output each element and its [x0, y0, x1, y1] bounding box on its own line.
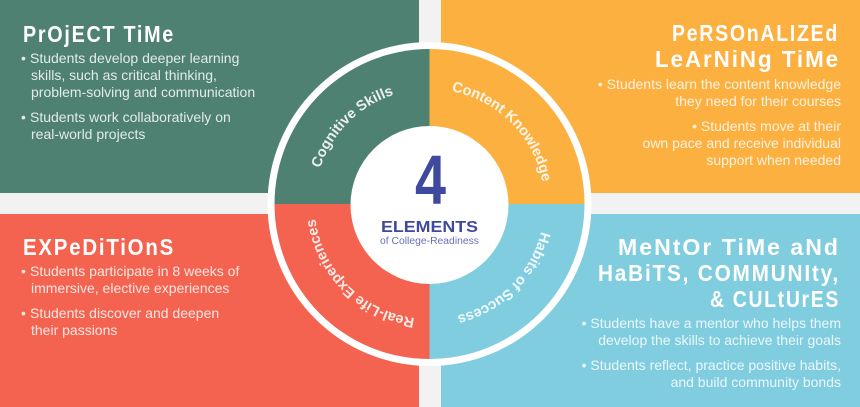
heading: mentor time and habits, community, and cultures: & CULtUrES [710, 286, 840, 312]
panel: expeditions [0, 214, 419, 407]
heading: mentor time and habits, community, and cultures [598, 234, 840, 312]
quadrant: cognitive skills [274, 49, 430, 204]
text block: expeditions bullets: Students discover and deepen [30, 305, 219, 321]
text block: mentor time bullets: • Students have a mentor who helps them [582, 315, 841, 331]
text block: expeditions bullets: Students participate in 8 weeks of [30, 263, 239, 279]
text block: personalized learning bullets: support when needed [706, 152, 841, 168]
quadrant: cognitive skills: Cognitive Skills [312, 88, 393, 166]
text block: expeditions bullets: immersive, elective experiences [31, 280, 229, 296]
text block: personalized learning bullets: • Students learn the content knowledge [598, 76, 841, 92]
text block: project time bullets: real-world projects [31, 126, 145, 142]
text block: project time bullets [21, 50, 255, 142]
heading: expeditions: EXPeDiTiOnS [23, 234, 175, 260]
quadrant: habits of success: Habits of Success [458, 232, 550, 322]
text block: personalized learning bullets: • Students move at their [692, 118, 841, 134]
heading: personalized learning time: LeArNiNg TiMe [655, 46, 840, 72]
text block: project time bullets: • [21, 50, 26, 66]
heading: project time: PrOjECT TiMe [23, 21, 175, 47]
text block: mentor time bullets: develop the skills to achieve their goals [598, 332, 841, 348]
quadrant: real-life experiences [274, 204, 430, 359]
text block: expeditions bullets [21, 263, 239, 338]
heading: mentor time and habits, community, and cultures: MeNtOr TiMe aNd [618, 234, 840, 260]
text block: mentor time bullets [582, 315, 841, 390]
numeral 4: 4 [415, 141, 446, 219]
label: of college-readiness: of College-Readiness [380, 236, 479, 247]
text block: personalized learning bullets: own pace and receive individual [643, 135, 841, 151]
label: elements: ELEMENTS [381, 219, 478, 236]
heading: mentor time and habits, community, and cultures: HaBiTS, COMMUNIty, [598, 260, 840, 286]
panel: mentor time [441, 214, 860, 407]
heading: personalized learning time [655, 20, 840, 72]
text block: personalized learning bullets: they need for their courses [675, 93, 841, 109]
quadrant: content knowledge: Content Knowledge [453, 82, 550, 181]
center badge [350, 126, 508, 284]
text block: project time bullets: Students work collaboratively on [30, 109, 231, 125]
panel: project time [0, 0, 419, 193]
text block: mentor time bullets: • Students reflect, practice positive habits, [582, 357, 841, 373]
text block: expeditions bullets: their passions [31, 322, 117, 338]
text block: expeditions bullets: • [21, 305, 26, 321]
text block: project time bullets: skills, such as critical thinking, [31, 67, 217, 83]
text block: project time bullets: Students develop deeper learning [30, 50, 239, 66]
circle diagram [268, 42, 592, 366]
text block: personalized learning bullets [598, 76, 841, 168]
text block: expeditions bullets: • [21, 263, 26, 279]
quadrant: real-life experiences: Real-Life Experiences [308, 220, 414, 328]
text block: project time bullets: problem-solving and communication [31, 84, 255, 100]
quadrant: content knowledge [430, 49, 584, 204]
text block: mentor time bullets: and build community bonds [671, 374, 841, 390]
quadrant: habits of success [430, 204, 584, 359]
text block: project time bullets: • [21, 109, 26, 125]
panel: personalized learning time [441, 0, 860, 193]
